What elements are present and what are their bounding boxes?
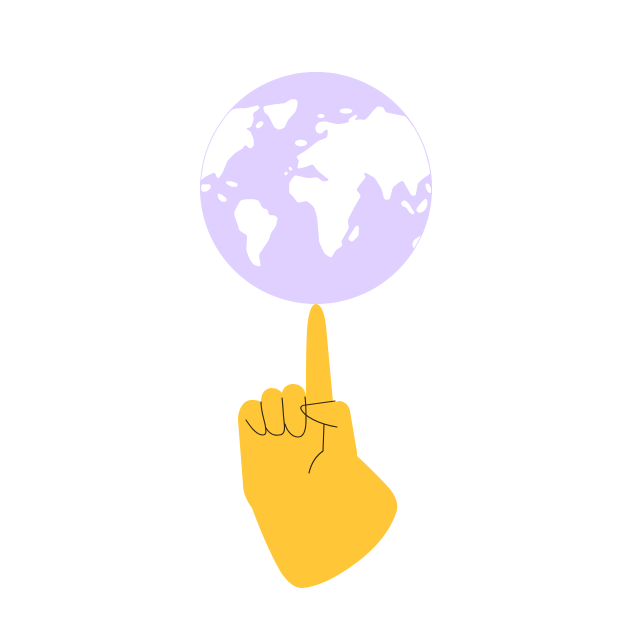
hand bbox=[238, 304, 397, 588]
Ireland bbox=[285, 172, 287, 175]
little finger crease bbox=[246, 402, 266, 435]
finger crease lines bbox=[246, 397, 337, 473]
globe rim bbox=[200, 72, 432, 304]
palm crease bbox=[309, 424, 324, 473]
Baffin Island bbox=[256, 122, 263, 128]
Madagascar bbox=[349, 226, 358, 241]
thumb outline bbox=[301, 401, 337, 427]
Japan strip bbox=[426, 184, 431, 193]
North America bbox=[201, 106, 259, 180]
globe sphere bbox=[200, 72, 432, 304]
Eurasia and Africa bbox=[290, 107, 430, 257]
New Guinea bbox=[417, 199, 427, 212]
British Isles bbox=[289, 167, 292, 170]
Iceland bbox=[296, 140, 306, 146]
hand silhouette with raised index finger bbox=[238, 304, 397, 588]
Central America islet bbox=[218, 194, 226, 201]
Indonesia bbox=[402, 201, 414, 214]
continents bbox=[201, 100, 431, 266]
Pacific edge blob bbox=[202, 185, 210, 191]
Arctic island two bbox=[349, 115, 357, 121]
Arctic island one bbox=[340, 109, 352, 113]
Caribbean blob bbox=[226, 182, 237, 186]
Arctic island three bbox=[318, 115, 324, 117]
globe bbox=[200, 72, 432, 304]
ring finger crease bbox=[266, 398, 284, 435]
middle finger crease bbox=[285, 397, 306, 437]
Greenland bbox=[264, 100, 297, 129]
Australia edge bbox=[413, 235, 421, 248]
South America bbox=[235, 200, 277, 266]
